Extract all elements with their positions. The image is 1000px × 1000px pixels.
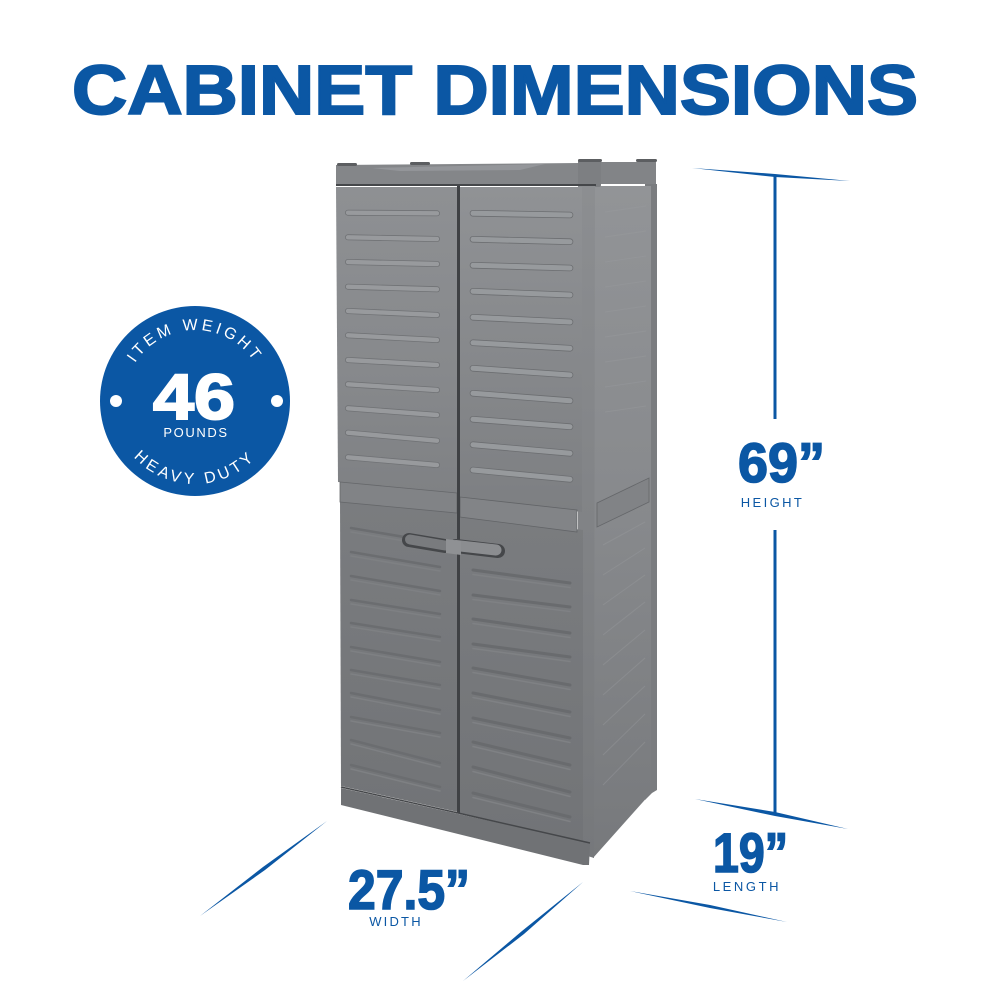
length value: 19” xyxy=(713,821,788,884)
height line upper xyxy=(774,175,776,419)
door gap xyxy=(457,186,460,813)
badge value: 46 xyxy=(153,361,235,433)
height line lower xyxy=(774,530,776,815)
height dimension xyxy=(692,168,850,829)
right door band xyxy=(460,497,577,532)
badge right dot xyxy=(271,395,283,407)
left door band xyxy=(340,482,457,513)
left door upper xyxy=(336,187,457,493)
cabinet illustration xyxy=(336,159,657,865)
width right tick xyxy=(463,882,583,981)
height label: HEIGHT xyxy=(741,495,804,510)
width left tick xyxy=(200,821,327,916)
badge arc label: heavy duty: HEAVY DUTY xyxy=(134,450,250,484)
title: CABINET DIMENSIONS xyxy=(72,51,918,129)
width value: 27.5” xyxy=(348,858,470,921)
corner post xyxy=(578,186,595,858)
width label: WIDTH xyxy=(369,914,423,929)
height bottom tick xyxy=(695,799,848,829)
weight badge xyxy=(100,306,290,496)
lower left slats xyxy=(351,528,440,791)
base xyxy=(341,788,590,865)
length dimension xyxy=(630,821,788,922)
length tick xyxy=(630,891,787,922)
height value: 69” xyxy=(738,431,825,494)
badge arc label: item weight: ITEM WEIGHT xyxy=(126,318,262,362)
right door upper xyxy=(460,187,582,512)
side panel xyxy=(590,184,657,858)
lower right slats xyxy=(473,570,570,822)
length label: LENGTH xyxy=(713,879,781,894)
left door lower xyxy=(340,500,458,812)
upper right slats xyxy=(473,213,570,479)
base edge xyxy=(341,787,590,843)
badge unit: POUNDS xyxy=(163,425,229,440)
upper left slats xyxy=(348,213,437,465)
width dimension xyxy=(200,821,583,981)
badge left dot xyxy=(110,395,122,407)
height top tick xyxy=(692,168,850,181)
handle xyxy=(409,539,498,555)
right door lower xyxy=(460,515,583,843)
top cap xyxy=(336,159,657,187)
